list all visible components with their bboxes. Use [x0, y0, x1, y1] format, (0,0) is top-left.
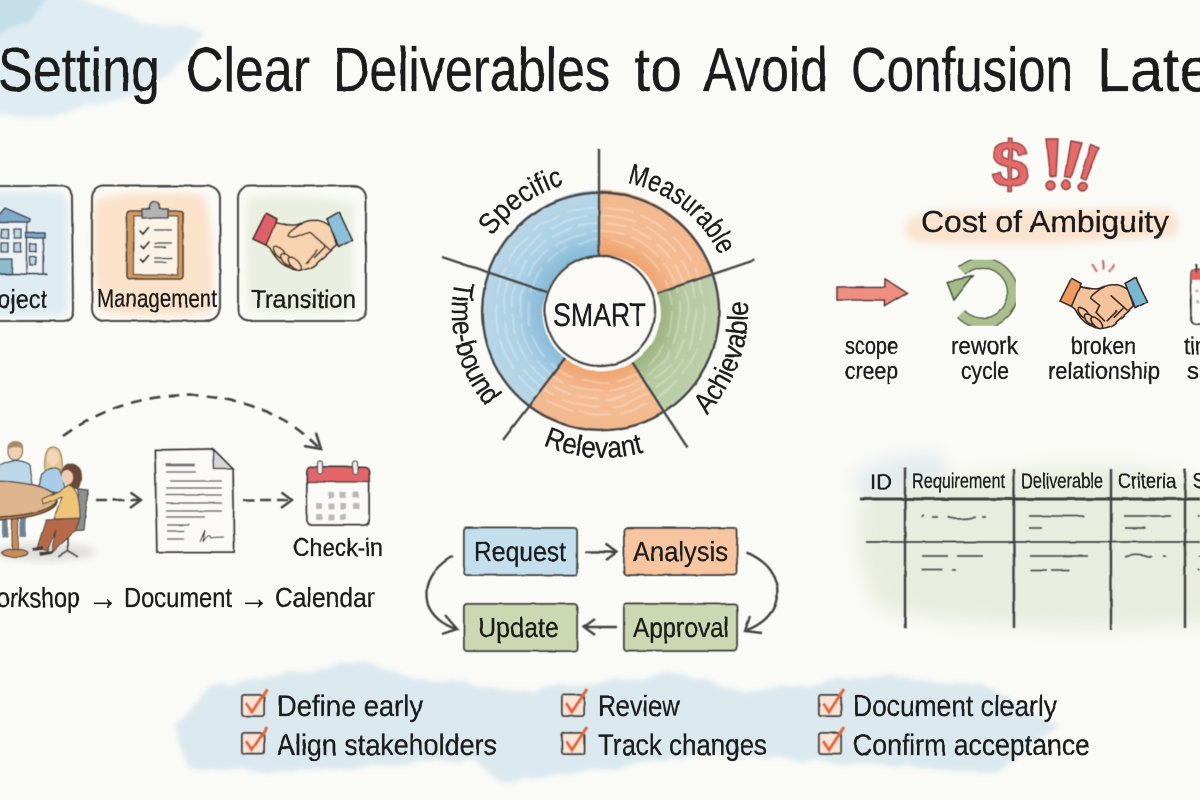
checklist text: Document clearly [853, 690, 1057, 723]
heading: cost of ambiguity: Cost of Ambiguity [921, 204, 1170, 239]
panel: workshop flow [0, 395, 383, 617]
panel: change process [426, 528, 777, 651]
checkboxes [242, 689, 844, 754]
icon: timeline calendar [1191, 264, 1200, 324]
box: request [464, 528, 577, 575]
checklist text: Define early [277, 690, 423, 723]
person: woman in yellow [32, 463, 82, 556]
card: management [92, 186, 220, 321]
checklist text: Track changes [598, 729, 767, 762]
heading banner [906, 209, 1178, 244]
box: request: Request [474, 536, 566, 567]
person: woman with blonde hair [39, 447, 66, 492]
labels: costs: rework [951, 333, 1019, 360]
checklist wash [175, 662, 1062, 783]
checklist text [277, 690, 1090, 762]
table grid [860, 467, 1200, 630]
icon: broken handshake [1060, 277, 1147, 331]
label: measurable: Measurable [628, 164, 732, 253]
icon: document [155, 449, 234, 552]
box: analysis: Analysis [633, 536, 728, 567]
label: workshop to document to calendar: → [239, 579, 269, 617]
checklist text: Confirm acceptance [853, 729, 1090, 762]
label: workshop to document to calendar: → [88, 579, 118, 617]
title: Confusion [851, 36, 1073, 105]
icon: calendar [307, 461, 369, 525]
arrow: dashed arc [63, 395, 321, 449]
title: Setting [0, 36, 160, 105]
label: management: Management [97, 285, 217, 313]
table headers: ID [870, 471, 892, 494]
label: time-bound: Time-bound [452, 284, 502, 406]
table headers: Criteria [1118, 470, 1176, 493]
table [0, 481, 57, 557]
card: project [0, 186, 73, 321]
title: to [634, 36, 682, 105]
icon: building [0, 208, 47, 274]
card: transition [238, 186, 366, 321]
table headers: Deliverable [1021, 470, 1103, 493]
panel: requirements table [850, 454, 1200, 630]
table scribbles [922, 514, 1200, 570]
label: SMART: SMART [553, 297, 646, 333]
label: relevant: Relevant [544, 426, 644, 458]
label: transition: Transition [251, 284, 356, 314]
chair [58, 489, 88, 557]
title [0, 36, 1200, 105]
box: approval: Approval [633, 612, 729, 643]
segment: specific [489, 190, 600, 292]
title: Deliverables [333, 36, 610, 105]
segment: time-bound [482, 272, 565, 405]
icon: rework cycle [947, 263, 1012, 323]
icon: scope arrow [837, 279, 907, 306]
icon: handshake [253, 212, 352, 272]
panel: checklist [175, 662, 1090, 783]
wheel outlines [442, 149, 755, 447]
label: workshop to document to calendar [0, 579, 375, 617]
icon: dollar and exclamations [991, 127, 1099, 201]
arrow: dashed to document [96, 492, 141, 508]
pencil streaks [496, 207, 704, 415]
title: Clear [186, 36, 310, 105]
title: Avoid [703, 36, 828, 105]
label: check-in: Check-in [293, 534, 383, 562]
illustration: workshop meeting [0, 441, 95, 561]
label: achievable: Achievable [696, 302, 748, 416]
labels: costs [845, 333, 1200, 385]
table wash [850, 454, 1200, 628]
labels: costs: broken [1071, 333, 1136, 360]
labels: costs: scope [845, 333, 898, 360]
table headers [870, 470, 1200, 494]
icon: sparks [1092, 260, 1114, 272]
arrows: process cycle [426, 544, 777, 635]
labels: costs: cycle [961, 358, 1009, 385]
label: workshop to document to calendar: Document [124, 582, 232, 613]
box: analysis [624, 528, 737, 575]
icon: clipboard [127, 202, 183, 279]
icon: dollar and exclamations: $ [991, 127, 1029, 201]
labels: costs: creep [845, 358, 898, 385]
chart: SMART wheel [441, 148, 756, 458]
box: update [464, 604, 577, 651]
label: workshop to document to calendar: Calendar [275, 582, 375, 613]
person: man [0, 441, 33, 537]
title wash [0, 0, 205, 118]
box: update: Update [478, 612, 559, 643]
label: specific: Specific [479, 170, 562, 234]
panel: cost of ambiguity [837, 127, 1200, 385]
segment: relevant [528, 358, 663, 430]
table headers: Requirement [912, 470, 1005, 493]
segment: measurable [600, 190, 713, 293]
panel: scope cards [0, 186, 366, 321]
checklist text: Align stakeholders [277, 729, 497, 762]
checklist text: Review [598, 690, 680, 723]
labels: costs: relationship [1048, 358, 1160, 385]
arrow: dashed to calendar [243, 492, 292, 508]
segment: achievable [632, 275, 719, 413]
box: approval [624, 604, 737, 651]
